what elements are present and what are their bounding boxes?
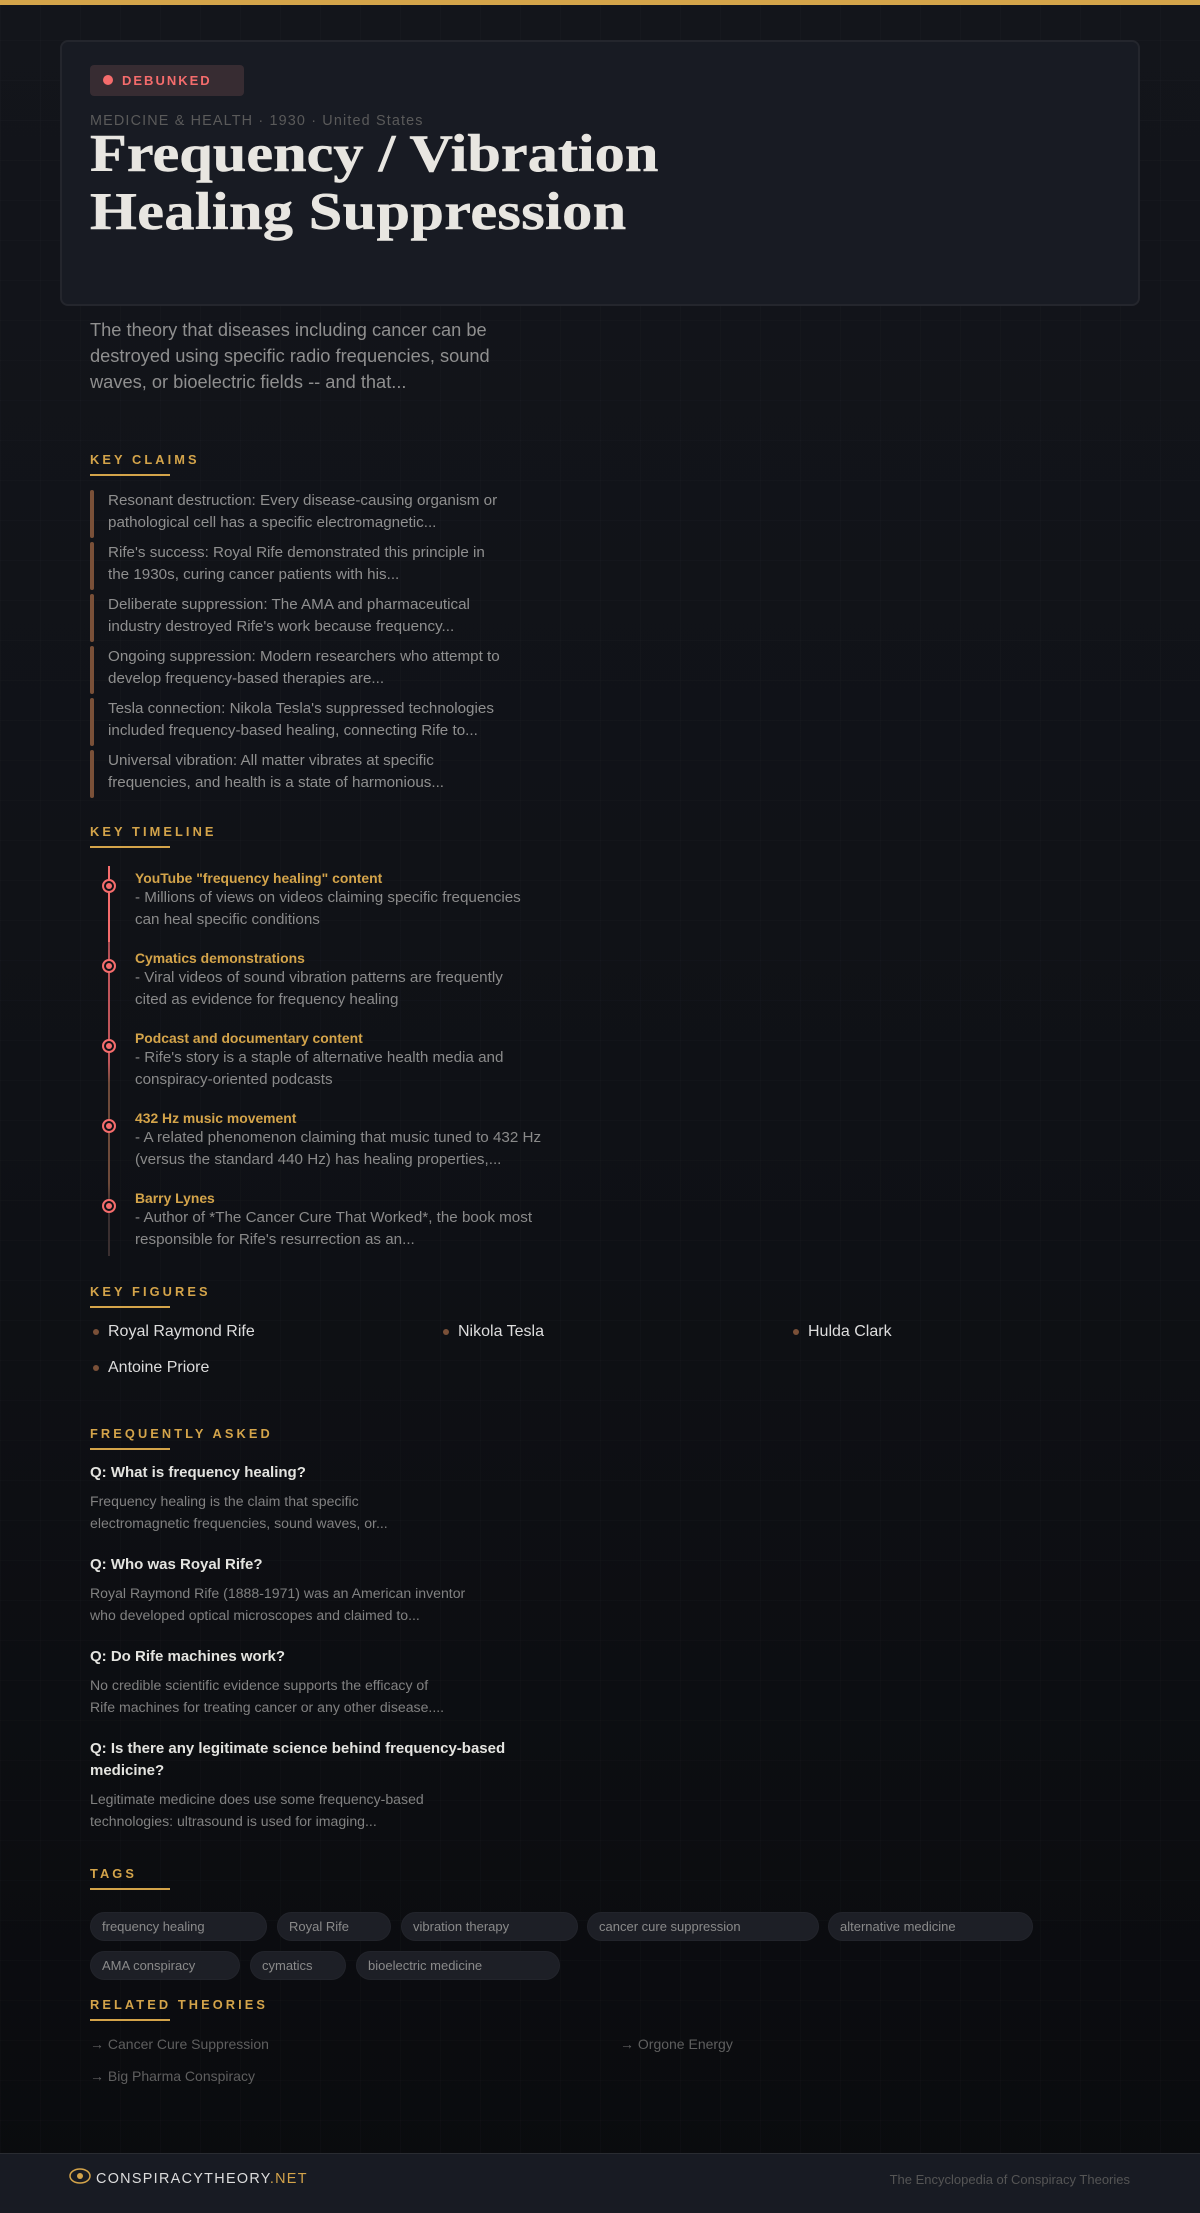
timeline item 2 [102, 950, 503, 1008]
figure: royal raymond rife: Royal Raymond Rife [108, 1323, 255, 1340]
related link: big pharma conspiracy: → Big Pharma Conspiracy [90, 2068, 255, 2084]
intro text: destroyed using specific radio frequencies, sound [90, 345, 490, 366]
panel: key figures [90, 1284, 892, 1376]
claim: tesla connection [90, 698, 494, 746]
badge label: DEBUNKED [122, 73, 212, 88]
icon: eye logo [69, 2168, 91, 2184]
figure: nikola tesla: Nikola Tesla [458, 1323, 544, 1340]
claim: ongoing suppression: develop frequency-based therapies are... [108, 670, 384, 687]
timeline item 2: Cymatics demonstrations [135, 950, 305, 966]
tag: AMA conspiracy [102, 1958, 195, 1973]
claim: ongoing suppression: Ongoing suppression: Modern researchers who attempt to [108, 648, 500, 665]
claim: universal vibration: Universal vibration: All matter vibrates at specific [108, 752, 434, 769]
claim: tesla connection: included frequency-based healing, connecting Rife to... [108, 722, 478, 739]
panel: hero header [60, 40, 1140, 306]
title: Frequency / Vibration [90, 125, 658, 183]
tag: frequency healing [102, 1919, 205, 1934]
faq 3: Rife machines for treating cancer or any other disease.... [90, 1699, 444, 1715]
footer [0, 2153, 1200, 2213]
claim: tesla connection: Tesla connection: Nikola Tesla's suppressed technologies [108, 700, 494, 717]
tag [250, 1951, 346, 1980]
faq 4: medicine? [90, 1762, 164, 1779]
timeline item 1: YouTube "frequency healing" content [135, 870, 382, 886]
figure: antoine priore: Antoine Priore [108, 1359, 209, 1376]
panel: tags [90, 1866, 1033, 1980]
heading: key claims: KEY CLAIMS [90, 452, 200, 467]
heading: tags: TAGS [90, 1866, 137, 1881]
tag [90, 1912, 267, 1941]
claim: rife's success [90, 542, 485, 590]
panel: key claims [90, 452, 500, 798]
timeline item 3: - Rife's story is a staple of alternative health media and [135, 1049, 503, 1066]
timeline item 5 [102, 1190, 532, 1248]
tag [356, 1951, 560, 1980]
faq 4: Q: Is there any legitimate science behind frequency-based [90, 1740, 505, 1757]
claim: deliberate suppression: industry destroyed Rife's work because frequency... [108, 618, 454, 635]
title: Healing Suppression [90, 183, 627, 241]
intro text [90, 319, 490, 392]
tag: bioelectric medicine [368, 1958, 482, 1973]
claim: ongoing suppression [90, 646, 500, 694]
tag [828, 1912, 1033, 1941]
faq 4 [90, 1740, 505, 1829]
title [90, 125, 658, 241]
timeline item 4 [102, 1110, 541, 1168]
tag [587, 1912, 819, 1941]
faq 2: Royal Raymond Rife (1888-1971) was an American inventor [90, 1585, 465, 1601]
heading: key figures: KEY FIGURES [90, 1284, 211, 1299]
heading: related theories: RELATED THEORIES [90, 1997, 268, 2012]
intro text: The theory that diseases including cancer can be [90, 319, 487, 340]
related link: cancer cure suppression: → Cancer Cure Suppression [90, 2036, 269, 2052]
claim: universal vibration [90, 750, 444, 798]
badge: debunked [90, 65, 244, 96]
timeline item 3: Podcast and documentary content [135, 1030, 363, 1046]
tag: Royal Rife [289, 1919, 349, 1934]
tagline: The Encyclopedia of Conspiracy Theories [890, 2172, 1130, 2187]
claim: rife's success: the 1930s, curing cancer patients with his... [108, 566, 399, 583]
timeline item 5: responsible for Rife's resurrection as an... [135, 1231, 415, 1248]
faq 3 [90, 1648, 444, 1715]
faq 2 [90, 1556, 465, 1623]
timeline item 4: (versus the standard 440 Hz) has healing properties,... [135, 1151, 501, 1168]
heading: key timeline: KEY TIMELINE [90, 824, 217, 839]
tag [90, 1951, 240, 1980]
tag [401, 1912, 578, 1941]
faq 3: No credible scientific evidence supports the efficacy of [90, 1677, 428, 1693]
category line: MEDICINE & HEALTH · 1930 · United States [90, 113, 424, 129]
timeline item 2: cited as evidence for frequency healing [135, 991, 398, 1008]
timeline item 5: - Author of *The Cancer Cure That Worked*, the book most [135, 1209, 532, 1226]
panel: frequently asked [90, 1426, 505, 1829]
panel: key timeline [90, 824, 541, 1256]
timeline item 1: - Millions of views on videos claiming specific frequencies [135, 889, 521, 906]
tag [277, 1912, 391, 1941]
logo wordmark: CONSPIRACYTHEORY.NET [96, 2171, 308, 2187]
tag: cancer cure suppression [599, 1919, 741, 1934]
timeline item 1: can heal specific conditions [135, 911, 320, 928]
timeline item 3 [102, 1030, 503, 1088]
panel: related theories [90, 1997, 733, 2084]
tag: cymatics [262, 1958, 313, 1973]
claim: resonant destruction: Resonant destruction: Every disease-causing organism or [108, 492, 497, 509]
timeline rail [108, 866, 110, 1256]
faq 4: Legitimate medicine does use some frequency-based [90, 1791, 424, 1807]
faq 4: technologies: ultrasound is used for imaging... [90, 1813, 377, 1829]
timeline item 2: - Viral videos of sound vibration patterns are frequently [135, 969, 503, 986]
tag: vibration therapy [413, 1919, 509, 1934]
timeline item 5: Barry Lynes [135, 1190, 215, 1206]
faq 2: who developed optical microscopes and claimed to... [90, 1607, 420, 1623]
faq 1 [90, 1464, 388, 1531]
claim: universal vibration: frequencies, and health is a state of harmonious... [108, 774, 444, 791]
claim: deliberate suppression [90, 594, 470, 642]
faq 1: Frequency healing is the claim that specific [90, 1493, 359, 1509]
heading: frequently asked: FREQUENTLY ASKED [90, 1426, 273, 1441]
timeline item 4: 432 Hz music movement [135, 1110, 296, 1126]
tag: alternative medicine [840, 1919, 956, 1934]
timeline item 1 [102, 870, 521, 928]
icon: status dot [103, 75, 113, 85]
faq 2: Q: Who was Royal Rife? [90, 1556, 263, 1573]
faq 1: Q: What is frequency healing? [90, 1464, 306, 1481]
faq 3: Q: Do Rife machines work? [90, 1648, 285, 1665]
intro text: waves, or bioelectric fields -- and that... [90, 371, 406, 392]
figure: hulda clark: Hulda Clark [808, 1323, 892, 1340]
faq 1: electromagnetic frequencies, sound waves, or... [90, 1515, 388, 1531]
claim: resonant destruction [90, 490, 497, 538]
related link: orgone energy: → Orgone Energy [620, 2036, 733, 2052]
top accent bar [0, 0, 1200, 5]
claim: deliberate suppression: Deliberate suppression: The AMA and pharmaceutical [108, 596, 470, 613]
claim: resonant destruction: pathological cell has a specific electromagnetic... [108, 514, 436, 531]
timeline item 3: conspiracy-oriented podcasts [135, 1071, 333, 1088]
claim: rife's success: Rife's success: Royal Rife demonstrated this principle in [108, 544, 485, 561]
timeline item 4: - A related phenomenon claiming that music tuned to 432 Hz [135, 1129, 541, 1146]
